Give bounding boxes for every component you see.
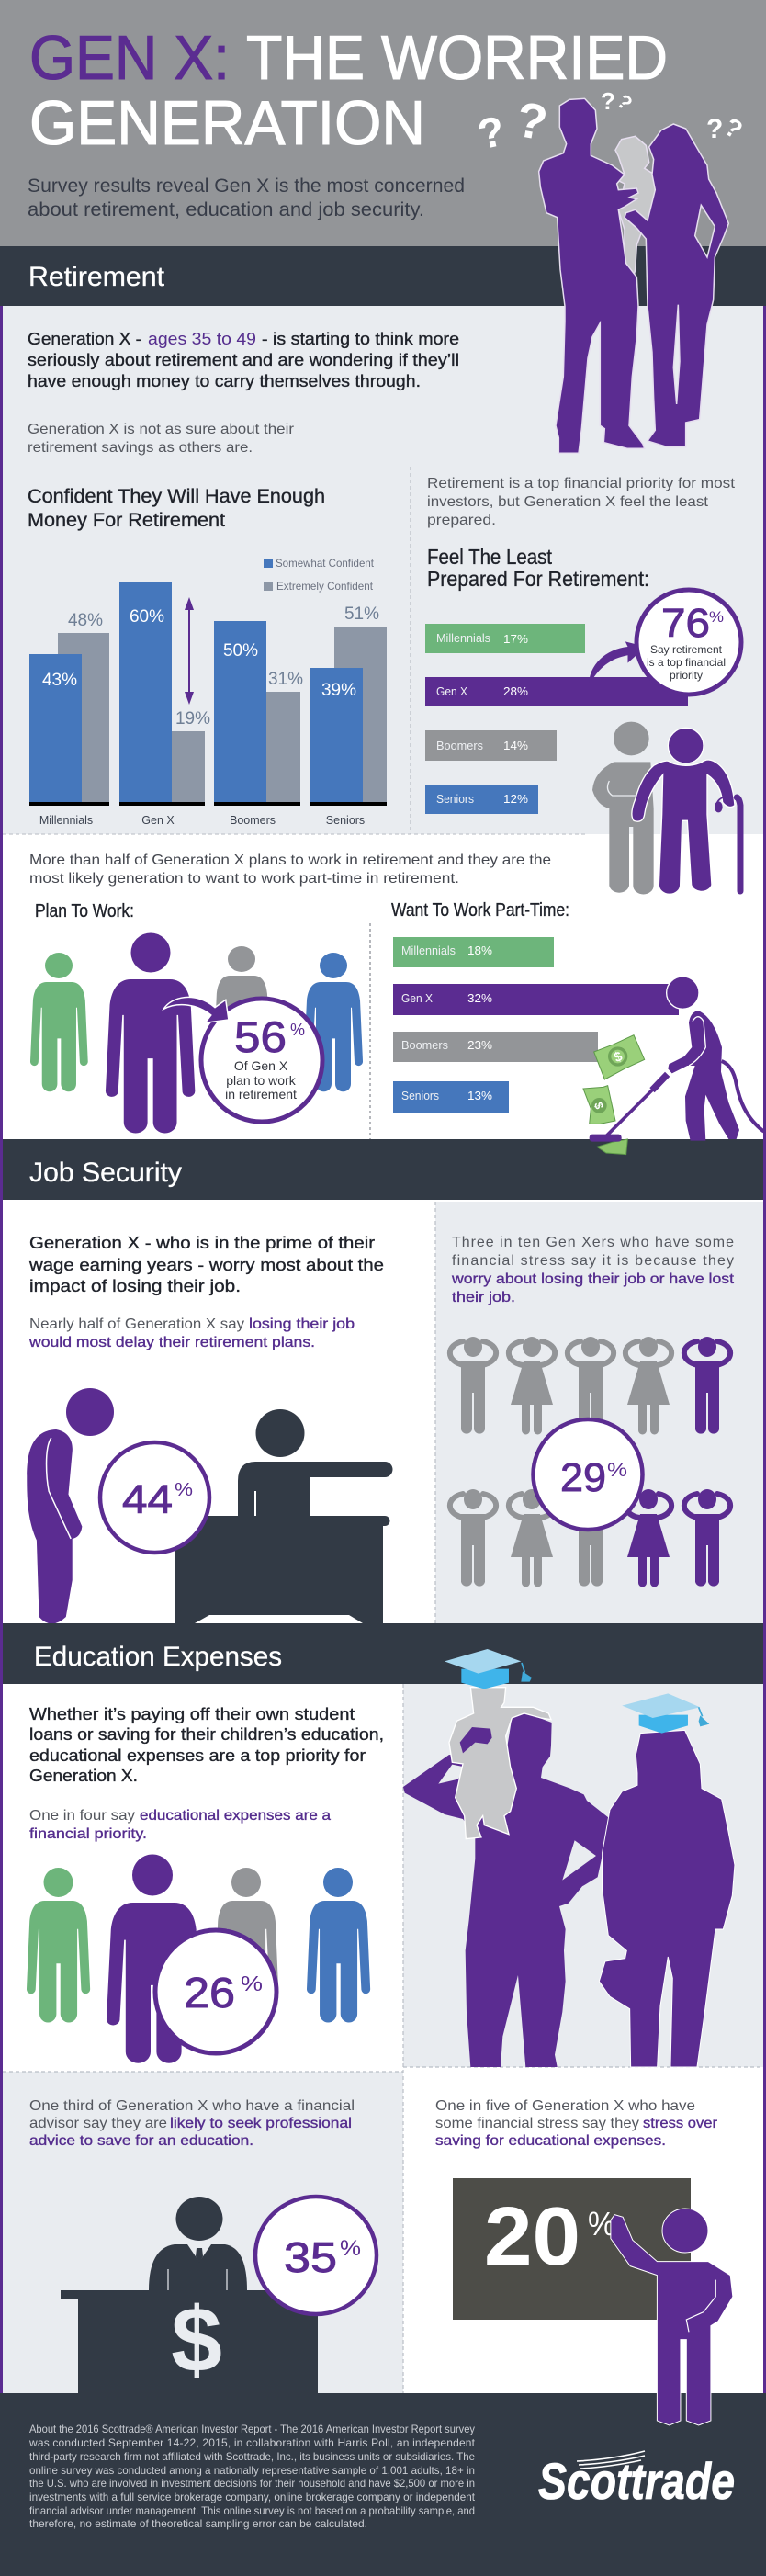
text block: plan to work intro: More than half of Generation X plans to work in retirement and they are the [29,853,551,868]
text block: survey disclaimer [28,2423,476,2530]
text block: education intro: Whether it’s paying off their own student [29,1705,355,1723]
callout: 56 percent: 56 [234,1012,287,1061]
text block: job security intro: Generation X - who is in the prime of their [29,1234,375,1252]
bar chart: want to work part-time: Gen X [401,991,433,1005]
panel: plan to work background [0,834,766,1139]
person: gray [214,946,270,1085]
bar chart: want to work part-time [393,937,679,1113]
callout: 76 percent: is a top financial [647,656,726,669]
text block: one in four: One in four say [29,1808,135,1824]
icon: money bill on floor [597,1139,627,1155]
icon: teacher [611,2209,733,2425]
text block: one in five: One in five of Generation X who have [435,2098,695,2114]
icon: elderly couple [592,722,740,894]
illustration: family silhouette [539,98,728,453]
text block: three in ten: worry about losing their job or have lost [451,1271,735,1287]
callout: 29 percent: 29 [560,1455,606,1500]
person: purple [107,1854,200,2063]
icon: question marks: ? [601,87,615,115]
panel: job security right [435,1202,763,1623]
text block: top financial priority [427,476,736,528]
text block: three in ten [451,1235,735,1305]
callout: 76 percent: 76 [661,601,710,646]
panel: education right [403,1684,763,2067]
callout: 26 percent [155,1930,276,2053]
text block: one in four [29,1808,331,1842]
text block: retirement intro [28,330,459,390]
text block: survey disclaimer: financial advisor under management. This online survey is not based on a probability sample, and [29,2504,475,2517]
callout: 44 percent [100,1442,209,1553]
bar chart: want to work part-time: Boomers [401,1038,448,1052]
chart legend: Somewhat Confident [276,557,375,570]
heading: plan to work: Plan To Work: [35,901,134,921]
icon: child's graduation cap [445,1649,532,1689]
arrow: gap between confidence levels [185,597,194,705]
text block: top financial priority: Retirement is a top financial priority for most [427,476,736,491]
callout: 76 percent: priority [670,669,703,682]
text block: nearly half: would most delay their retirement plans. [28,1335,315,1350]
bar chart: want to work part-time: 23% [467,1038,492,1052]
callout: 56 percent [201,999,322,1122]
person: blue [307,1868,370,2023]
bar chart: least prepared: 17% [503,632,528,646]
text block: plan to work intro: most likely generation to want to work part-time in retirement. [29,871,459,887]
bars: Gen X: Gen X [141,814,175,827]
text block: education intro: educational expenses are a top priority for [29,1746,366,1765]
text block: one in five: stress over [643,2116,718,2131]
header panel [0,0,766,246]
icon: manager at desk [175,1409,393,1623]
icon: money bill two [583,1086,615,1124]
text block: top financial priority: prepared. [427,513,496,528]
person: gray [592,722,654,894]
callout: 76 percent [636,590,741,695]
heading: feel the least prepared: Feel The Least [427,545,553,569]
text block: survey disclaimer: investments with a full service brokerage company, online brokerage company or independent [29,2491,476,2503]
icon: question marks: ? [613,89,636,115]
text block: one third: advisor say they are [29,2116,167,2131]
chart heading: Money For Retirement [28,510,225,531]
person: blue [304,953,363,1091]
callout: 44 percent: 44 [122,1477,173,1522]
arrow: curved to 56 percent [163,997,229,1022]
callout: 26 percent: 26 [184,1969,235,2017]
bars: Gen X: 19% [175,709,210,729]
icon: question marks: ? [706,114,723,144]
text block: education intro: Generation X. [29,1767,138,1785]
text block: survey disclaimer: therefore, no estimate of theoretical sampling error can be calculated. [29,2517,367,2530]
heading: Education Expenses [0,1623,766,1684]
bars: Boomers [214,621,303,827]
text block: retirement savings note: Generation X is not as sure about their [28,422,295,437]
icon: question marks: ? [474,107,509,158]
callout: 56 percent: % [290,1021,305,1039]
callout: 26 percent: % [241,1972,263,1995]
chart heading: Confident They Will Have Enough [28,486,325,507]
person: purple [106,933,195,1133]
bar chart: confident they will have enough money [28,486,387,827]
subtitle: about retirement, education and job security. [28,198,424,220]
bar chart: least prepared: 12% [503,792,528,806]
text block: one third [29,2098,355,2149]
callout: 29 percent: % [607,1460,627,1481]
heading: Education Expenses: Education Expenses [34,1642,282,1672]
icon: question marks: ? [513,92,551,152]
subtitle: Survey results reveal Gen X is the most concerned [28,175,465,197]
bar chart: least prepared: Seniors [436,792,474,806]
silhouette: mother [625,124,728,447]
bars: Gen X: 60% [130,607,164,627]
bar chart: want to work part-time: Millennials [401,943,456,957]
icon: cane [715,797,740,891]
bars: Seniors: 51% [344,604,379,624]
row two [450,1489,730,1587]
text block: retirement intro: seriously about retirement and are wondering if they’ll [28,351,459,369]
text block: retirement savings note [28,422,295,456]
panel: advisor [3,2072,403,2393]
horizontal section divider [3,833,588,835]
bars: Seniors [310,604,387,827]
icon: dismissed purple worker [27,1388,114,1623]
callout: 56 percent: plan to work [226,1073,297,1088]
bars: Millennials [29,611,109,827]
heading: Job Security: Job Security [29,1158,182,1188]
subtitle [28,175,465,220]
icon: worried people grid [450,1337,730,1587]
bars: Millennials: 48% [68,611,103,630]
icon: advisor at desk [61,2197,318,2393]
panel: stress [403,2067,763,2393]
callout: 35 percent: % [340,2236,361,2261]
gap under raised arm [438,1765,465,1784]
person: green [30,953,88,1091]
text block: survey disclaimer: the U.S. who are involved in investment decisions for their household and have $2,500 or more in [29,2477,475,2490]
text block: top financial priority: investors, but Generation X feel the least [427,494,709,510]
callout: 35 percent: 35 [284,2233,337,2281]
panel: education left [3,1684,403,2072]
text block: one in five: some financial stress say they [435,2116,639,2131]
bar chart: want to work part-time: 13% [467,1089,492,1102]
silhouette: father [539,98,645,453]
text block: education intro [29,1705,384,1785]
icon: mother's graduation cap [622,1693,709,1734]
text block: nearly half: Nearly half of Generation X say [29,1316,244,1332]
text block: survey disclaimer: was conducted September 14-22, 2015, in collaboration with Harris Poll, an independent [28,2436,476,2449]
bar chart: want to work part-time: Seniors [401,1089,439,1102]
illustration: parents with child and graduation caps [403,1649,735,2067]
icon: money bill one: $ [612,1049,625,1066]
text block: survey disclaimer: third-party research firm not affiliated with Scottrade, Inc., its business units or subsidiaries. The [29,2450,475,2463]
bar chart: least prepared: 14% [503,739,528,752]
person: purple [632,728,735,894]
text block: plan to work intro [29,853,551,887]
text block: retirement intro: - is starting to think more [262,330,459,348]
text block: job security intro: wage earning years - worry most about the [28,1256,384,1274]
text block: nearly half: losing their job [249,1316,355,1332]
text block: retirement savings note: retirement savings as others are. [28,440,253,456]
chart heading [28,486,325,531]
title [29,23,668,158]
icon: four people education [27,1854,370,2063]
person: gray [215,1868,278,2023]
icon: chalkboard with 20 percent: 20 [484,2191,580,2283]
silhouette: father [403,1713,608,2067]
panel: retirement intro and charts background [0,306,766,834]
heading: feel the least prepared [427,545,649,591]
text block: one in four: financial priority. [29,1826,147,1842]
bars: Millennials: 43% [42,671,77,690]
text block: three in ten: Three in ten Gen Xers who have some [452,1235,734,1250]
silhouette: mother [599,1730,735,2067]
callout: 56 percent: in retirement [225,1087,297,1102]
icon: question marks: ? [719,112,748,144]
bars: Seniors: 39% [321,681,356,700]
text block: job security intro [28,1234,384,1295]
vacuum stick and brush [590,1074,668,1142]
side borders [0,1200,766,1623]
callout: 44 percent: % [175,1480,193,1500]
bars: Seniors: Seniors [326,814,365,827]
vacuum hose [722,1061,764,1132]
silhouette: father's hand [460,1727,492,1753]
title: GENERATION [29,88,425,158]
person: green [27,1868,90,2023]
text block: survey disclaimer: online survey was conducted among a nationally representative sample of 1,001 adults, 18+ in [29,2464,475,2477]
text block: one in five: saving for educational expenses. [435,2133,666,2149]
divider [410,467,411,834]
bar chart: least prepared: Boomers [436,739,483,752]
panel: footer [0,2393,766,2576]
divider [434,1202,436,1623]
callout: 76 percent: % [709,608,724,626]
chart legend: Extremely Confident [276,580,374,593]
bar chart: least prepared: Millennials [436,631,490,645]
text block: education intro: loans or saving for their children’s education, [29,1725,384,1744]
icon: money bill two: $ [591,1101,605,1111]
icon: chalkboard with 20 percent [453,2178,691,2320]
callout: 56 percent: Of Gen X [234,1058,288,1073]
bars: Boomers: Boomers [230,814,276,827]
row one [450,1337,730,1435]
bars: Boomers: 50% [223,641,258,661]
text block: retirement intro: Generation X - [28,330,141,348]
text block: job security intro: impact of losing their job. [29,1277,241,1295]
panel: job security left [3,1200,435,1623]
icon: question marks [474,87,748,158]
person [667,977,739,1141]
arrow: curved to 76 percent [589,641,646,686]
heading: feel the least prepared: Prepared For Retirement: [427,567,649,591]
text block: survey disclaimer: About the 2016 Scottrade® American Investor Report - The 2016 American Investor Report survey [29,2423,475,2435]
bar chart: least prepared [425,624,688,814]
icon: chalkboard with 20 percent: % [588,2205,615,2243]
bar chart: least prepared: Gen X [436,684,467,698]
bar chart: least prepared: 28% [503,684,528,698]
bars: Boomers: 31% [268,670,303,689]
bar chart: want to work part-time: 18% [467,943,492,957]
text block: three in ten: financial stress say it is because they [452,1253,734,1269]
bar chart: want to work part-time: 32% [467,991,492,1005]
silhouette: child [449,1688,551,1839]
side borders [0,1684,766,2393]
title: THE WORRIED [246,23,668,93]
text block: retirement intro: ages 35 to 49 [148,330,256,348]
text block: one in five [435,2098,718,2149]
text block: one third: likely to seek professional [170,2116,352,2131]
silhouette: child [615,136,657,277]
bars: Gen X [119,582,210,827]
icon: advisor at desk: $ [171,2288,222,2391]
heading: want to work part-time: Want To Work Part-Time: [391,900,569,921]
callout: 76 percent: Say retirement [650,643,723,656]
heading: Job Security [0,1139,766,1200]
callout: 35 percent [255,2197,377,2314]
divider [369,923,371,1139]
title: GEN X: [29,23,230,93]
bars: Millennials: Millennials [39,814,93,827]
heading: Retirement: Retirement [28,262,165,292]
icon: money bill one [594,1035,645,1079]
text block: one third: One third of Generation X who have a financial [29,2098,355,2114]
text block: nearly half [28,1316,355,1350]
dividers [3,1684,763,2393]
icon: person sweeping money [583,977,764,1155]
icon: four people [30,933,363,1133]
callout: 29 percent [533,1419,643,1530]
text block: one third: advice to save for an education. [29,2133,253,2149]
chart legend [264,557,375,593]
text block: retirement intro: have enough money to carry themselves through. [28,372,421,390]
text block: three in ten: their job. [452,1290,515,1305]
text block: one in four: educational expenses are a [140,1808,331,1824]
heading: Retirement [0,246,766,306]
